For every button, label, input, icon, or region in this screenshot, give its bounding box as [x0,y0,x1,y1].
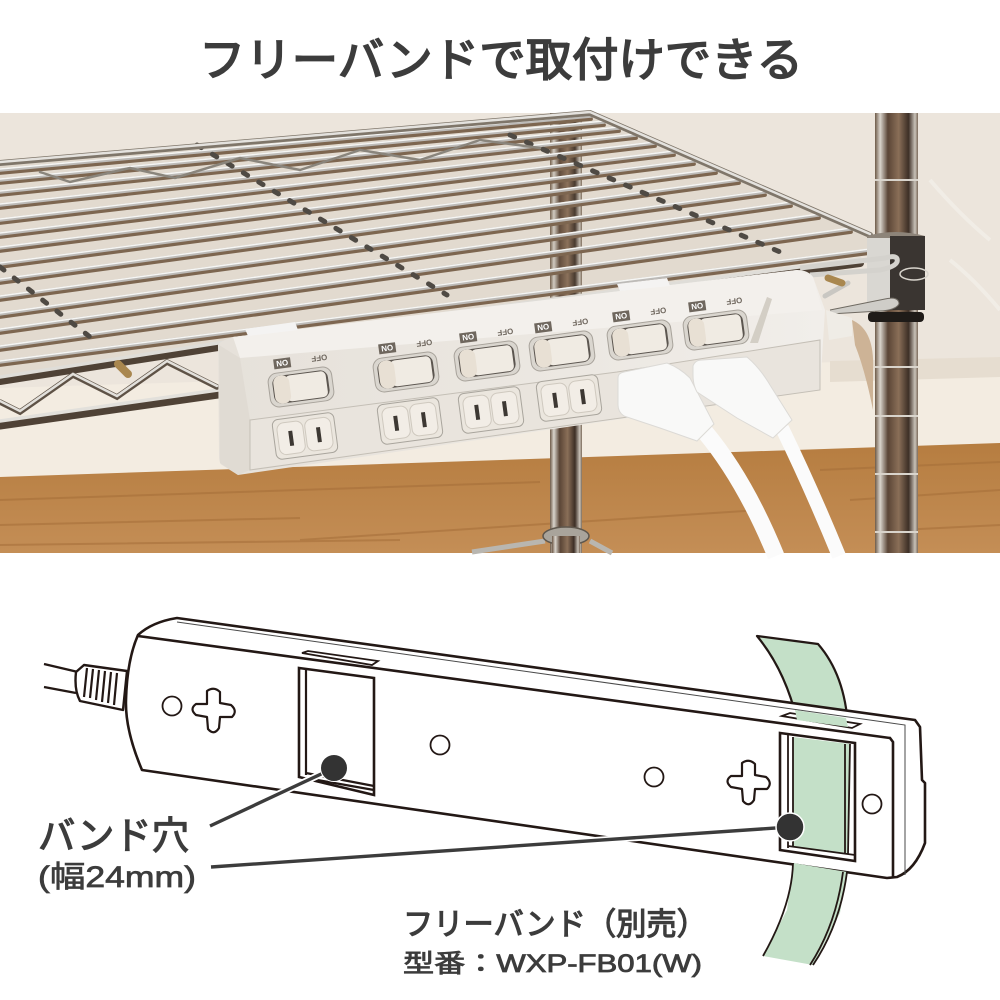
plug 2 [693,357,792,438]
velcro band right [617,278,670,291]
switch 3: OFF [497,326,514,337]
plug 1 [618,363,714,441]
switch 1: ON [275,358,289,368]
label: band hole width: (幅24mm) [38,861,196,894]
outlet panel [250,340,820,470]
switch 5: OFF [650,305,667,316]
strip body outline [126,618,925,878]
outlet 4 [536,374,602,422]
switch 3: ON [461,332,475,342]
diagram: back of power strip [44,618,925,965]
wire shelf [0,112,870,425]
mounting hole 1 [162,696,182,716]
callout line to left band hole [210,754,348,826]
rear cord bushing [826,310,852,340]
rear shelf post [550,113,582,553]
end slant groove [750,297,772,343]
cord [44,664,78,693]
cord grommet [76,665,127,710]
outlet 3 [458,386,524,434]
switch 4: ON [536,322,550,332]
green band bottom [763,863,847,965]
label: free band sold separately: フリーバンド（別売） [403,907,707,942]
label: band hole: バンド穴 [38,816,189,858]
label: model number: 型番：WXP-FB01(W) [403,950,702,978]
cord 1 [705,432,776,556]
cord 2 [782,428,839,556]
band slot left [299,668,374,795]
top slot right [782,713,860,728]
front shelf post [875,113,918,553]
top slot left [302,651,378,665]
mounting hole 4 [862,794,882,814]
keyhole cross right [728,761,770,804]
switch 5 [604,305,674,361]
power strip [218,270,852,556]
green band top [757,636,848,727]
switch 2: ON [380,343,394,353]
callout line to right band hole [211,813,804,867]
photo: power strip mounted on wire shelf [0,112,1000,556]
mounting hole 3 [644,768,664,786]
switch 1: OFF [311,352,328,363]
switch 5: ON [614,311,628,321]
switch 4 [526,316,596,372]
switch 6: OFF [726,295,743,306]
mounting hole 2 [430,736,450,754]
shelf area tone [0,113,870,378]
title: フリーバンドで取付けできる [199,34,803,86]
strip top bevel [233,270,822,358]
outlet 2 [377,397,443,445]
strip face edge [138,636,893,877]
switch 3 [451,326,521,382]
band slot right [780,733,855,861]
green band upper overlap [795,710,848,727]
photo background: wooden floor [0,443,1000,553]
switch 2: OFF [416,337,433,348]
power cord behind post [852,320,873,410]
photo background: skirting board [0,357,1000,477]
shelf foot collar and rods [472,527,612,553]
green band bottom edges [763,863,847,965]
switch 4: OFF [572,316,589,327]
switch 1 [265,352,335,408]
switch 6 [680,295,750,351]
velcro band left [245,322,298,336]
switch 6: ON [690,301,704,311]
keyhole cross left [192,689,235,732]
strip end facet [219,345,250,475]
switch 2 [370,337,440,393]
outlet 1 [272,412,338,460]
photo background: wall [0,113,1000,553]
strip body [218,270,825,475]
shelf corner bracket [800,232,928,322]
strip thin inner line [177,622,905,875]
